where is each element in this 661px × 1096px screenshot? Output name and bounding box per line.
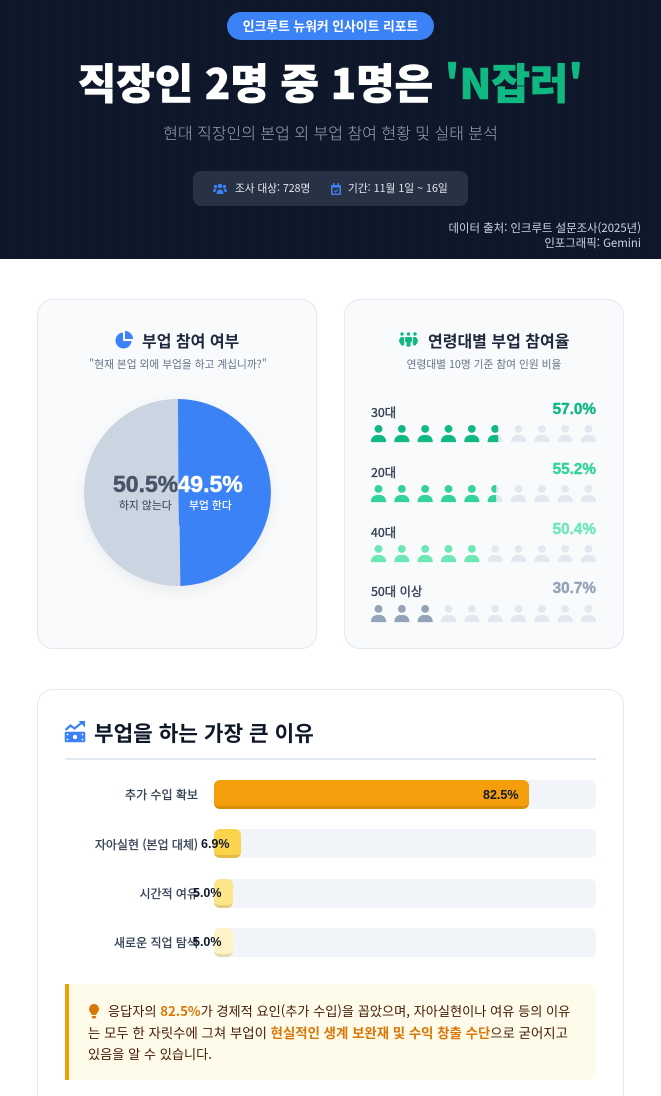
percent: 20s: 55.2% <box>553 461 596 478</box>
bar track 2 <box>214 829 596 858</box>
bar fill 3 <box>214 879 233 908</box>
panel: reasons <box>37 689 624 1096</box>
survey info pill <box>193 171 468 206</box>
header banner <box>0 0 661 259</box>
callout <box>65 984 596 1080</box>
panel: age participation <box>344 299 624 649</box>
value: no: 50.5% <box>113 471 178 497</box>
bar track 1 <box>214 780 596 809</box>
callout text: 는 모두 한 자릿수에 그쳐 부업이 현실적인 생계 보완재 및 수익 창출 수단으로 굳어지고 <box>88 1022 568 1042</box>
bar value 4: 5.0% <box>193 935 222 949</box>
label: 50s: 50대 이상 <box>371 582 422 600</box>
row: 40s <box>371 521 596 562</box>
bar value 2: 6.9% <box>201 837 230 851</box>
subheading: age: 연령대별 10명 기준 참여 인원 비율 <box>407 357 561 372</box>
heading: participation: 부업 참여 여부 <box>142 328 239 352</box>
icon: pie chart <box>116 331 133 348</box>
bar label 1: 추가 수입 확보 <box>125 786 198 803</box>
label: no: 하지 않는다 <box>119 497 172 513</box>
icon: people <box>213 184 227 194</box>
data source: 데이터 출처: 인크루트 설문조사(2025년) <box>449 220 641 236</box>
bar label 4: 새로운 직업 탐색 <box>114 934 198 951</box>
person icons: 30s <box>371 425 596 442</box>
badge <box>227 12 434 40</box>
survey target: 조사 대상: 728명 <box>235 181 310 196</box>
data source: 인포그래픽: Gemini <box>544 234 641 250</box>
icon: money chart <box>64 721 86 742</box>
percent: 50s: 30.7% <box>553 580 596 597</box>
bar label 2: 자아실현 (본업 대체) <box>95 836 198 853</box>
row: 20s <box>371 461 596 502</box>
question text: "현재 본업 외에 부업을 하고 계십니까?" <box>89 357 267 372</box>
bar fill 1 <box>214 780 529 809</box>
row: 50s and over <box>371 580 596 622</box>
percent: 40s: 50.4% <box>553 521 596 538</box>
subtitle: 현대 직장인의 본업 외 부업 참여 현황 및 실태 분석 <box>163 120 498 144</box>
callout text: 응답자의 82.5%가 경제적 요인(추가 수입)을 꼽았으며, 자아실현이나 여유 등의 이유 <box>108 1001 570 1020</box>
icon: lightbulb <box>89 1004 99 1018</box>
label: 40s: 40대 <box>371 523 396 541</box>
title: 직장인 2명 중 1명은 'N잡러' <box>78 52 583 112</box>
person icons: 50s <box>371 605 596 622</box>
data source <box>449 220 641 250</box>
label: yes: 부업 한다 <box>189 497 232 513</box>
bar fill 4 <box>214 928 233 957</box>
row: 30s <box>371 401 596 442</box>
person icons: 20s <box>371 485 596 502</box>
badge: 인크루트 뉴워커 인사이트 리포트 <box>243 16 418 35</box>
bar track 3 <box>214 879 596 908</box>
survey period: 기간: 11월 1일 ~ 16일 <box>348 181 448 196</box>
heading: age: 연령대별 부업 참여율 <box>428 328 569 352</box>
bar value 1: 82.5% <box>483 788 518 802</box>
callout text <box>88 1001 570 1063</box>
pie chart <box>84 399 271 590</box>
bar value 3: 5.0% <box>193 886 222 900</box>
bar fill 2 <box>214 829 241 858</box>
icon: calendar <box>331 183 341 195</box>
callout text: 있음을 알 수 있습니다. <box>88 1044 212 1063</box>
person icons: 40s <box>371 545 596 562</box>
value: yes: 49.5% <box>178 471 243 497</box>
panel: participation pie <box>37 299 317 649</box>
label: 20s: 20대 <box>371 463 396 481</box>
bar track 4 <box>214 928 596 957</box>
icon: people group <box>399 332 418 347</box>
heading: reasons: 부업을 하는 가장 큰 이유 <box>94 717 314 748</box>
bar label 3: 시간적 여유 <box>139 885 198 902</box>
percent: 30s: 57.0% <box>553 401 596 418</box>
label: 30s: 30대 <box>371 403 396 421</box>
